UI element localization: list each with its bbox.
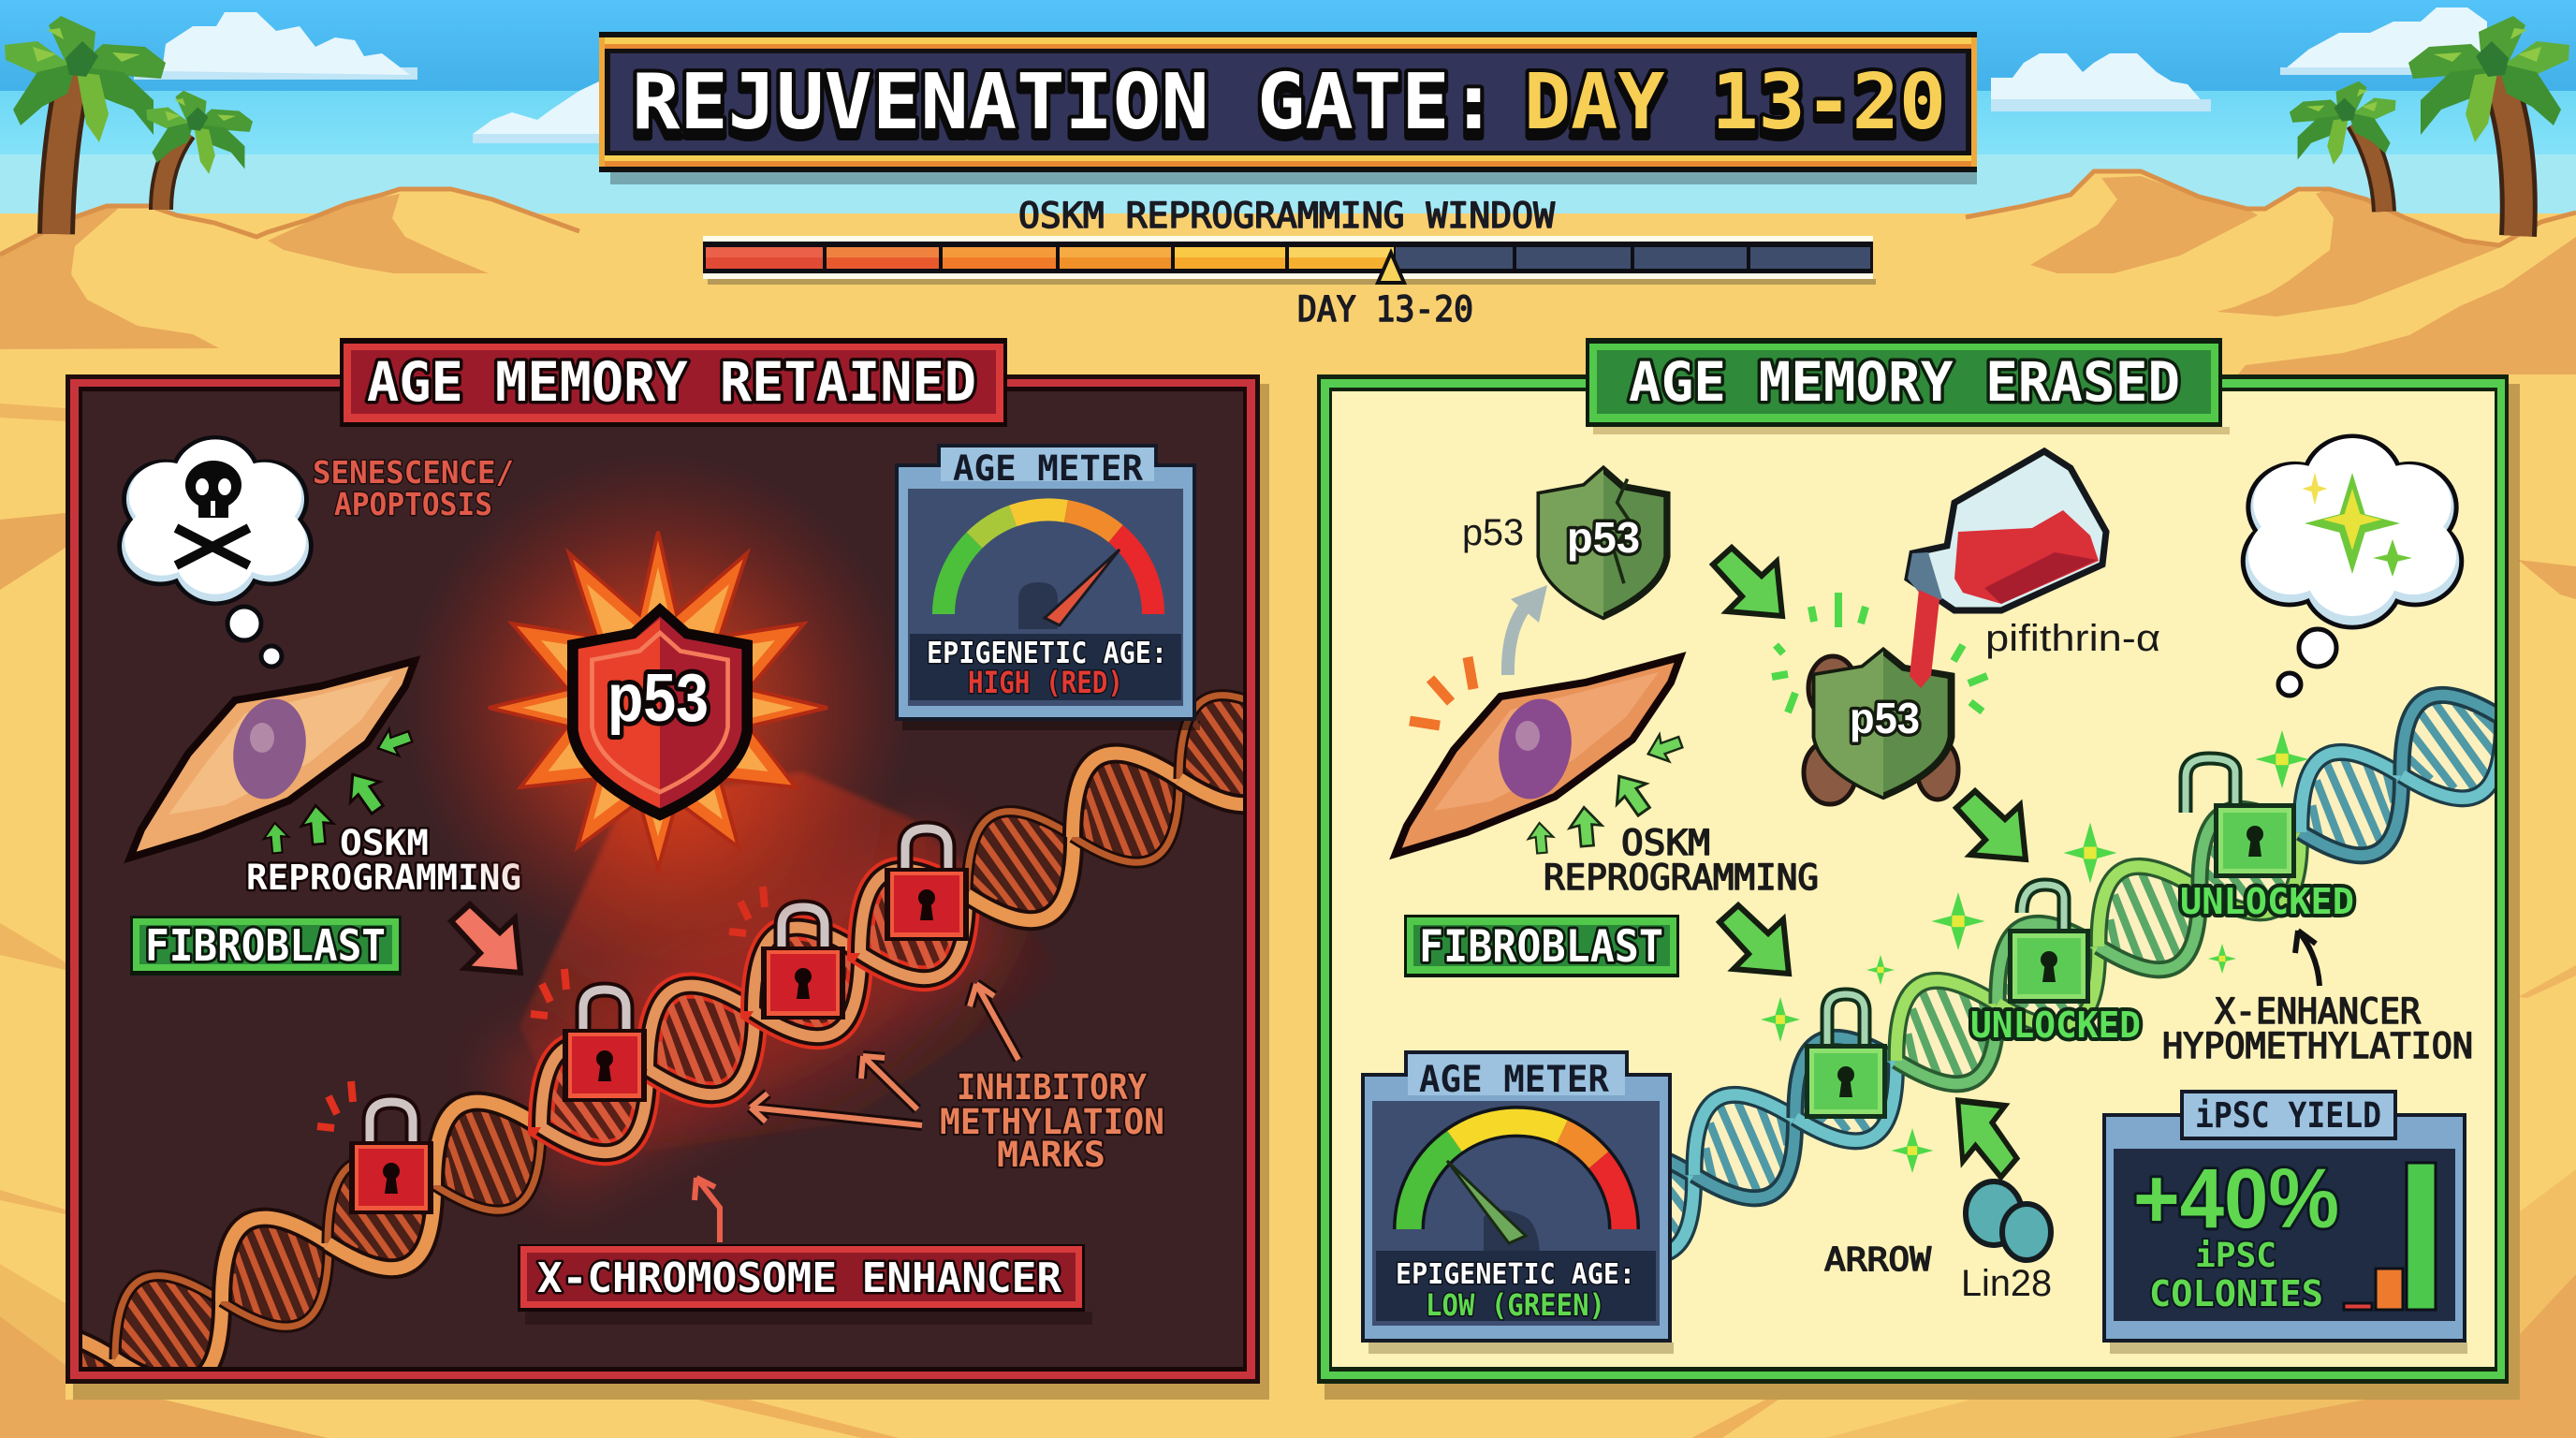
cracked p53 shield: p53 xyxy=(1567,513,1640,562)
yield caption: iPSC xyxy=(2195,1237,2276,1275)
banner: age memory erased: AGE MEMORY ERASED xyxy=(1629,350,2180,414)
card title: iPSC YIELD xyxy=(2195,1095,2381,1136)
arrow: fibroblast to DNA xyxy=(451,904,520,973)
senescence label: APOPTOSIS xyxy=(334,486,492,522)
palm trees xyxy=(5,16,2569,236)
cracked p53 shield xyxy=(1540,470,1667,616)
arrow: p53 to DNA xyxy=(1956,791,2026,859)
fibroblast badge: FIBROBLAST xyxy=(145,920,386,971)
panel: age memory retained xyxy=(66,338,1269,1400)
inhibitory methylation marks label: INHIBITORY xyxy=(957,1067,1148,1108)
DNA helix unlocked xyxy=(1566,670,2529,1280)
icon: star sparkle xyxy=(2303,472,2412,577)
age meter: low xyxy=(1361,1050,1674,1354)
banner: age memory retained: AGE MEMORY RETAINED xyxy=(367,350,976,414)
senescence label xyxy=(313,454,514,522)
OSKM label: OSKM xyxy=(1621,823,1710,863)
p53 label: p53 xyxy=(607,661,709,736)
title text xyxy=(632,58,1946,147)
readout xyxy=(1376,1251,1656,1323)
gauge xyxy=(1409,1122,1624,1229)
readout xyxy=(910,634,1181,700)
icon: pouring potion bottle xyxy=(1908,451,2106,688)
rocks and p53 shield with pifithrin: p53 xyxy=(1850,694,1920,742)
timeline heading: OSKM REPROGRAMMING WINDOW xyxy=(1018,196,1556,236)
green burst marks xyxy=(1772,593,1987,712)
green unlocked padlocks xyxy=(1805,758,2296,1119)
DNA helix with methylation xyxy=(0,670,1314,1438)
OSKM arrows xyxy=(262,723,415,854)
OSKM label: OSKM xyxy=(340,823,429,863)
timeline: OSKM reprogramming window xyxy=(703,196,1876,330)
icon: skull and crossbones xyxy=(176,461,249,565)
glow and beam from p53 to DNA xyxy=(520,771,1067,1161)
rocks and p53 shield with pifithrin xyxy=(1804,652,1958,804)
readout: HIGH (RED) xyxy=(968,665,1123,700)
arrow: Lin28 to DNA xyxy=(1958,1101,2017,1177)
age meter: high: AGE METER xyxy=(953,448,1144,489)
title banner xyxy=(599,32,1977,184)
orange stress marks xyxy=(1410,657,1473,726)
arrow: enhancer to DNA xyxy=(695,1178,720,1242)
gauge xyxy=(944,509,1153,614)
OSKM label xyxy=(246,823,521,898)
p53 label: p53 xyxy=(1462,512,1524,553)
inhibitory methylation arrows xyxy=(751,984,1018,1125)
readout: LOW (GREEN) xyxy=(1426,1287,1605,1323)
inhibitory methylation marks label: METHYLATION xyxy=(940,1102,1164,1142)
fibroblast cell xyxy=(1396,657,1680,854)
thought cloud: sparkle xyxy=(2246,438,2459,696)
fibroblast cell xyxy=(130,661,415,858)
day label: DAY 13-20 xyxy=(1297,289,1473,330)
fibroblast badge: FIBROBLAST xyxy=(1419,921,1663,973)
inhibitory methylation marks label xyxy=(940,1067,1164,1175)
iPSC yield card xyxy=(2102,1090,2467,1354)
banner: age memory retained xyxy=(340,338,1007,427)
unlocked labels: UNLOCKED xyxy=(1970,1005,2141,1046)
arrow: cell to p53 xyxy=(1508,585,1547,675)
pour stream xyxy=(1910,590,1939,688)
readout: EPIGENETIC AGE: xyxy=(1396,1258,1635,1291)
title text: REJUVENATION GATE: xyxy=(632,58,1498,147)
OSKM arrows xyxy=(1527,728,1685,854)
OSKM label: REPROGRAMMING xyxy=(1544,858,1819,898)
title text: DAY 13-20 xyxy=(1524,58,1946,147)
arrow: hypomethylation to DNA xyxy=(2295,931,2320,986)
thought cloud: death xyxy=(122,439,309,667)
icon: Lin28 spheres xyxy=(1966,1181,2051,1260)
green sparkles xyxy=(1761,730,2308,1173)
day marker xyxy=(1378,253,1404,283)
p53 shield with burst xyxy=(405,455,911,961)
x-enhancer hypomethylation label: HYPOMETHYLATION xyxy=(2162,1026,2473,1066)
needle xyxy=(1018,550,1120,629)
arrow label: ARROW xyxy=(1824,1241,1932,1279)
yield caption xyxy=(2149,1237,2323,1314)
age meter: high xyxy=(895,444,1200,730)
x-chromosome enhancer badge: X-CHROMOSOME ENHANCER xyxy=(537,1255,1062,1302)
age meter: low: AGE METER xyxy=(1419,1059,1609,1101)
OSKM label xyxy=(1544,823,1819,898)
x-chromosome enhancer badge xyxy=(518,1244,1092,1325)
needle xyxy=(1447,1161,1540,1259)
clouds xyxy=(134,7,2487,143)
yield caption: COLONIES xyxy=(2149,1273,2323,1314)
Lin28 label: Lin28 xyxy=(1961,1263,2052,1304)
arrow: fibroblast to DNA xyxy=(1720,905,1789,974)
panel: age memory erased xyxy=(1317,338,2529,1400)
senescence label: SENESCENCE/ xyxy=(313,454,514,491)
banner: age memory erased xyxy=(1586,338,2230,434)
unlocked labels: UNLOCKED xyxy=(2180,881,2354,922)
red locks xyxy=(317,829,969,1214)
OSKM label: REPROGRAMMING xyxy=(246,858,521,898)
arrow: p53 to inhibition xyxy=(1713,548,1782,616)
unlocked labels xyxy=(1970,881,2354,1046)
bar chart xyxy=(2344,1163,2436,1310)
yield value: +40% xyxy=(2133,1152,2339,1246)
readout: EPIGENETIC AGE: xyxy=(927,637,1167,670)
x-enhancer hypomethylation label xyxy=(2162,991,2473,1066)
inhibitory methylation marks label: MARKS xyxy=(997,1135,1105,1175)
pifithrin label: pifithrin-α xyxy=(1985,618,2160,659)
x-enhancer hypomethylation label: X-ENHANCER xyxy=(2215,991,2422,1032)
progress bar xyxy=(703,236,1876,285)
